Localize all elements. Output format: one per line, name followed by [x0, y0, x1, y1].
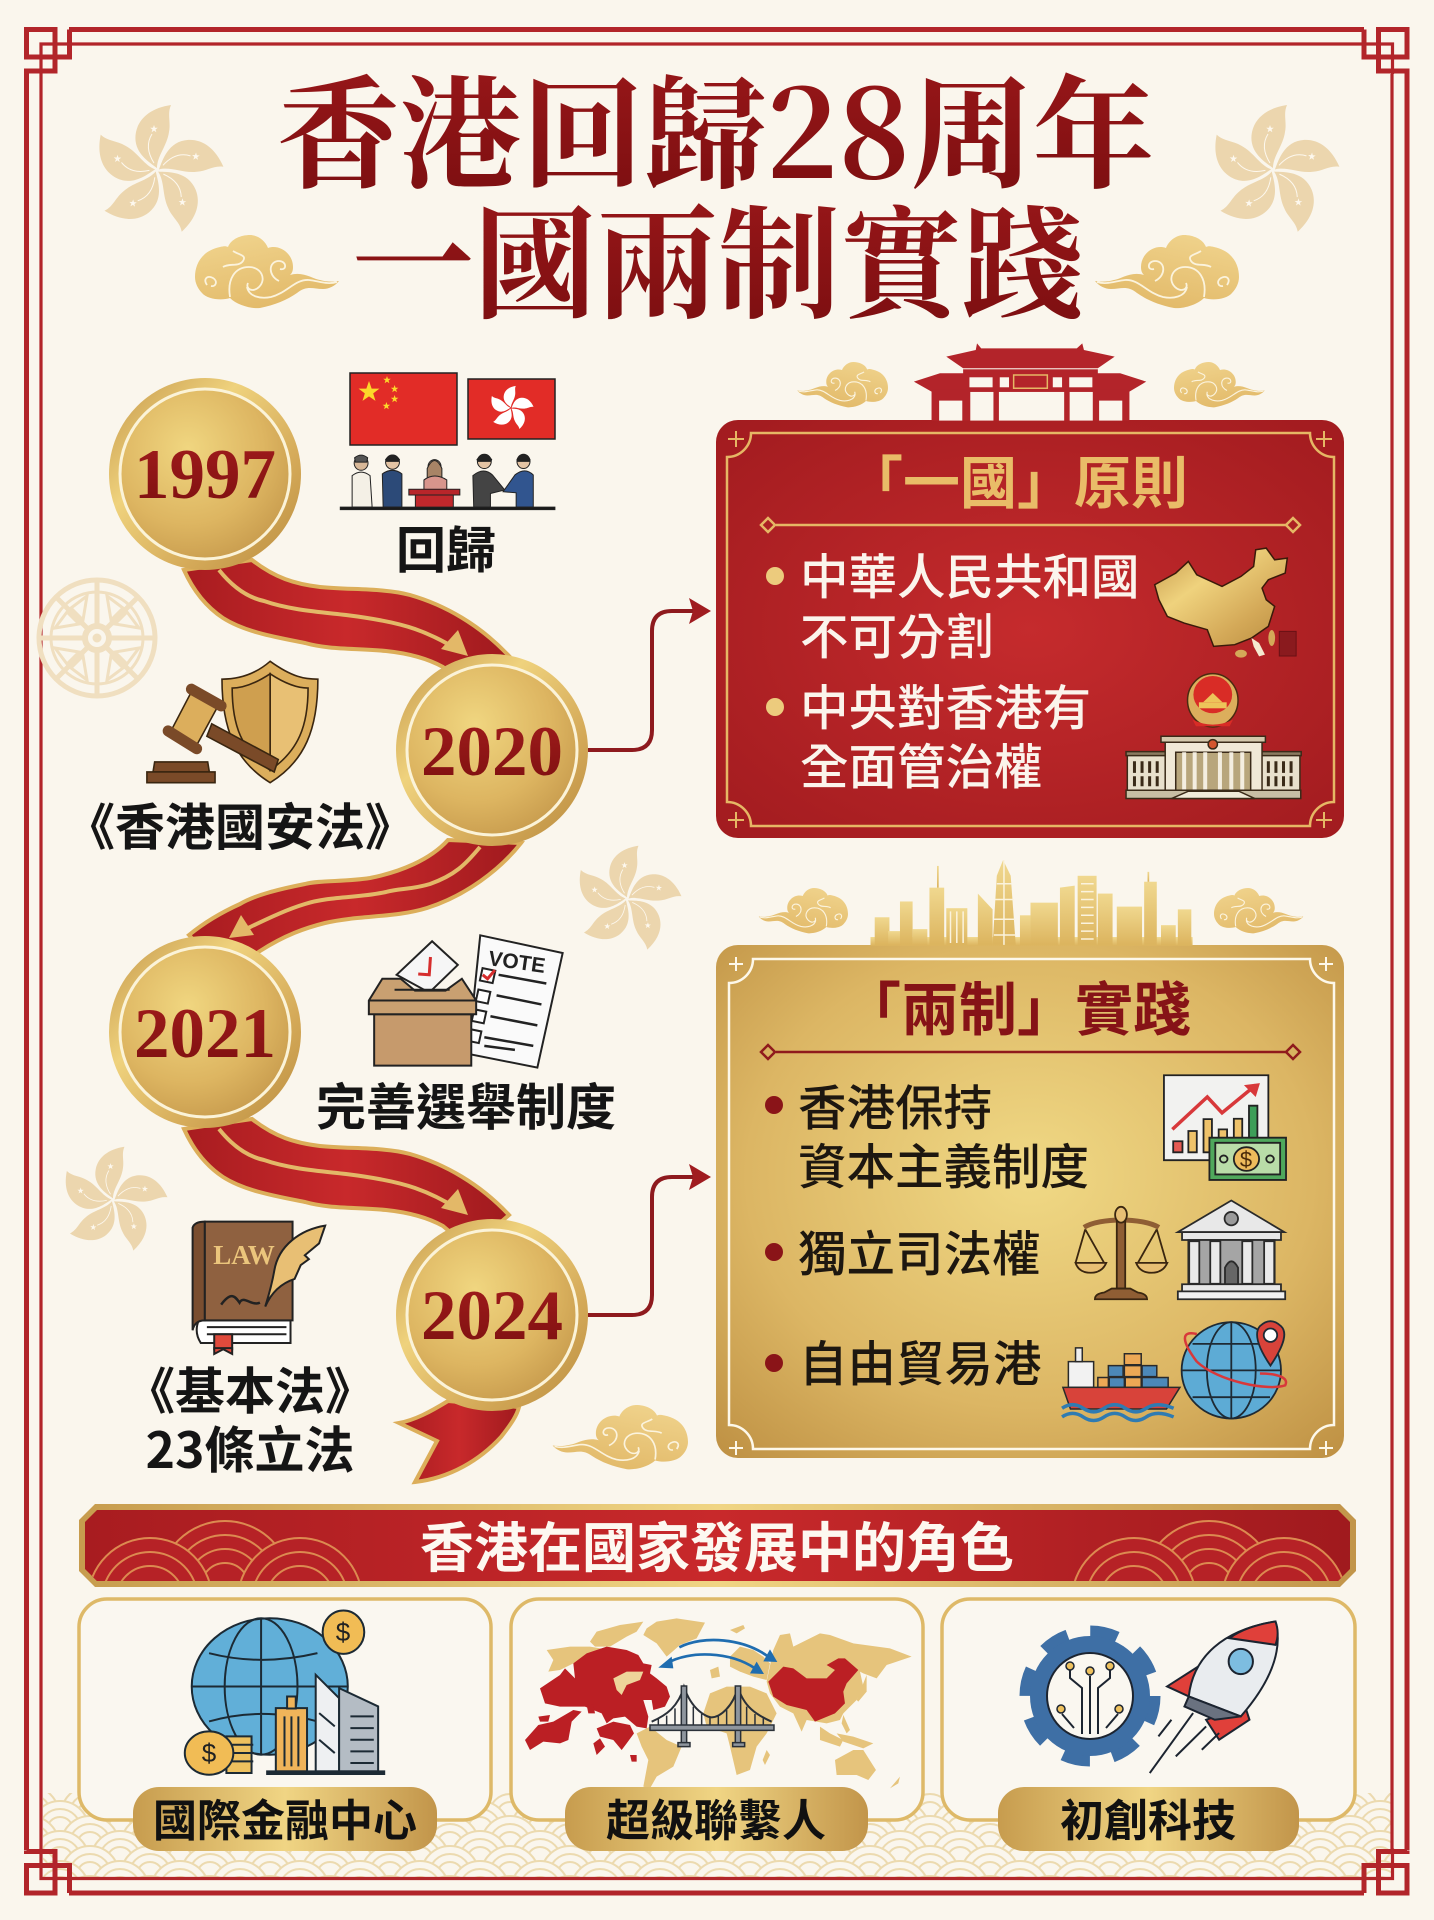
text: capitalism	[798, 1069, 1089, 1198]
text: free trade port: 自由貿易港	[799, 1325, 1042, 1395]
ribbon: 2020 to 2021	[189, 840, 521, 975]
icon: dollar on banknote: $	[1240, 1147, 1252, 1172]
seigaiha wave band	[43, 1793, 1392, 1877]
icon: pagoda gate	[914, 343, 1146, 421]
panel: startup tech card	[942, 1599, 1355, 1820]
icon: scales of justice	[1076, 1207, 1167, 1299]
icon: national emblem	[1188, 674, 1238, 727]
label pill: startup tech: 初創科技	[1060, 1785, 1236, 1849]
text: indivisible: 不可分割	[800, 598, 994, 668]
coin 2021	[109, 936, 301, 1128]
icon: cloud title left	[195, 235, 339, 308]
icon: law book	[193, 1222, 325, 1354]
text: indivisible	[800, 538, 1140, 668]
coin 2024: 2024	[421, 1277, 563, 1355]
icon: globe city coins	[185, 1611, 384, 1775]
ribbon: 2021 to 2024	[184, 1119, 509, 1249]
text: dollar signs	[202, 1617, 351, 1768]
icon: cloud by pagoda left	[797, 362, 888, 407]
label: return: 回歸	[396, 511, 496, 583]
icon: court building	[1178, 1200, 1285, 1299]
coin 1997	[109, 378, 301, 570]
text: law: LAW	[213, 1240, 275, 1270]
icon: flags	[350, 373, 555, 445]
icon: china map	[1155, 548, 1296, 658]
skyline	[871, 860, 1193, 946]
bullets two systems	[765, 1096, 783, 1372]
panel: one country	[716, 420, 1344, 838]
text: vote: VOTE	[487, 947, 547, 978]
text: dollar signs: $	[336, 1617, 351, 1647]
icon: gear with circuit	[1027, 1633, 1153, 1759]
icon: cloud by skyline right	[1214, 888, 1303, 933]
icon: container ship	[1062, 1348, 1180, 1421]
icon: globe and pin	[1182, 1321, 1286, 1419]
icon: cloud lower	[553, 1405, 688, 1469]
panel: financial centre card	[79, 1599, 491, 1820]
label pill: financial centre: 國際金融中心	[153, 1785, 417, 1849]
coin 2020: 2020	[421, 713, 563, 791]
label: basic law article 23: 《基本法》	[125, 1352, 375, 1424]
panel: super connector card	[511, 1599, 923, 1820]
label: national security law: 《香港國安法》	[65, 788, 415, 860]
icon: bauhinia top right	[1205, 105, 1339, 234]
text: capitalism: 香港保持	[798, 1069, 992, 1139]
text: overall jurisdiction: 全面管治權	[800, 728, 1043, 798]
divider	[761, 1045, 1300, 1059]
panel: two systems	[716, 945, 1344, 1458]
icon: bauhinia middle	[571, 846, 681, 951]
text: indivisible: 中華人民共和國	[800, 538, 1140, 608]
icon: chart and banknote	[1164, 1075, 1286, 1180]
coin 2021: 2021	[134, 995, 276, 1073]
label: basic law article 23	[125, 1352, 375, 1483]
icon: handover ceremony figures	[340, 454, 555, 510]
icon: cloud title right	[1095, 235, 1239, 308]
icon: ballot box	[369, 935, 563, 1068]
icon: cloud by skyline left	[759, 888, 848, 933]
text: overall jurisdiction	[800, 669, 1091, 798]
icon: bauhinia top left	[89, 105, 223, 234]
arrow: 2024 to two systems card	[588, 1164, 711, 1315]
title	[278, 38, 1154, 343]
icon: cloud by pagoda right	[1174, 362, 1265, 407]
icon: gavel and shield	[147, 661, 318, 783]
label pill: super connector: 超級聯繫人	[606, 1785, 826, 1849]
coin 2020	[396, 654, 588, 846]
title: 一國兩制實踐	[352, 168, 1084, 343]
icon: great hall	[1126, 736, 1301, 799]
text: dollar signs: $	[202, 1738, 217, 1768]
label pill: startup tech	[998, 1785, 1299, 1851]
heading: one country principle: 「一國」原則	[846, 438, 1188, 520]
icon: world map with bridge	[525, 1618, 912, 1788]
text: independent judiciary: 獨立司法權	[798, 1215, 1041, 1285]
title: 香港回歸28周年	[278, 38, 1154, 213]
text: overall jurisdiction: 中央對香港有	[800, 669, 1091, 739]
label: basic law article 23: 23條立法	[146, 1411, 354, 1483]
heading: two systems practice: 「兩制」實踐	[843, 963, 1191, 1047]
banner: role of Hong Kong	[79, 1504, 1356, 1587]
text: capitalism: 資本主義制度	[798, 1128, 1089, 1198]
bullets one country	[766, 567, 784, 716]
icon: rocket	[1150, 1622, 1278, 1773]
icon: bauhinia left	[57, 1147, 167, 1252]
label: improve electoral system: 完善選舉制度	[316, 1068, 616, 1140]
heading: role in national development: 香港在國家發展中的角色	[420, 1504, 1014, 1583]
coin 2024	[396, 1219, 588, 1411]
coin 1997: 1997	[134, 436, 276, 514]
ribbon tail	[399, 1401, 519, 1482]
arrow: 2020 to one country card	[588, 598, 711, 750]
icon: mandala	[39, 580, 155, 696]
divider	[761, 518, 1300, 532]
ribbon: 1997 to 2020	[184, 560, 509, 690]
